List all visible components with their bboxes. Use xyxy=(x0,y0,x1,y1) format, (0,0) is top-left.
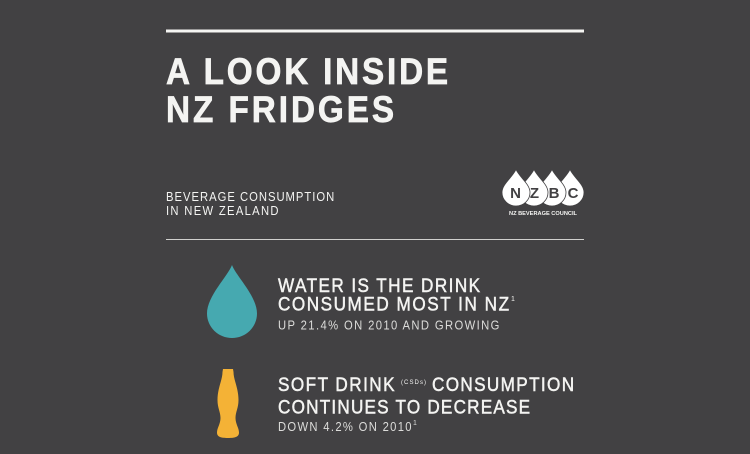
soft drink heading: (CSDs) xyxy=(401,380,426,386)
water heading: WATER IS THE DRINK xyxy=(278,274,481,296)
soft drink heading: CONTINUES TO DECREASE xyxy=(278,395,530,418)
subtitle: BEVERAGE CONSUMPTION xyxy=(166,189,334,204)
subtitle xyxy=(166,189,334,218)
logo letters: B xyxy=(549,185,560,202)
title: A LOOK INSIDE xyxy=(166,51,448,92)
soft drink subtext: 1 xyxy=(413,420,417,427)
water heading: 1 xyxy=(511,296,515,303)
title: NZ FRIDGES xyxy=(166,89,394,130)
water heading: CONSUMED MOST IN NZ xyxy=(278,292,509,315)
logo letters: C xyxy=(568,185,579,202)
water heading xyxy=(278,274,515,315)
logo letters: N xyxy=(510,185,521,202)
soft drink subtext: DOWN 4.2% ON 2010 xyxy=(278,419,412,434)
soft drink heading xyxy=(278,373,574,418)
soft drink heading: SOFT DRINK xyxy=(278,373,395,395)
logo letters: Z xyxy=(530,185,539,202)
soft drink heading: CONSUMPTION xyxy=(432,373,574,395)
water text block xyxy=(278,274,515,333)
logo caption: NZ BEVERAGE COUNCIL xyxy=(509,211,578,217)
icon: soft drink bottle xyxy=(217,369,239,438)
soft drink text block xyxy=(278,373,574,434)
icon: water drop xyxy=(207,265,257,338)
logo: NZ Beverage Council xyxy=(502,170,584,217)
subtitle: IN NEW ZEALAND xyxy=(166,203,279,218)
title xyxy=(166,51,448,130)
water subtext: UP 21.4% ON 2010 AND GROWING xyxy=(278,318,499,333)
logo drops xyxy=(502,170,584,206)
logo letters xyxy=(510,185,579,202)
